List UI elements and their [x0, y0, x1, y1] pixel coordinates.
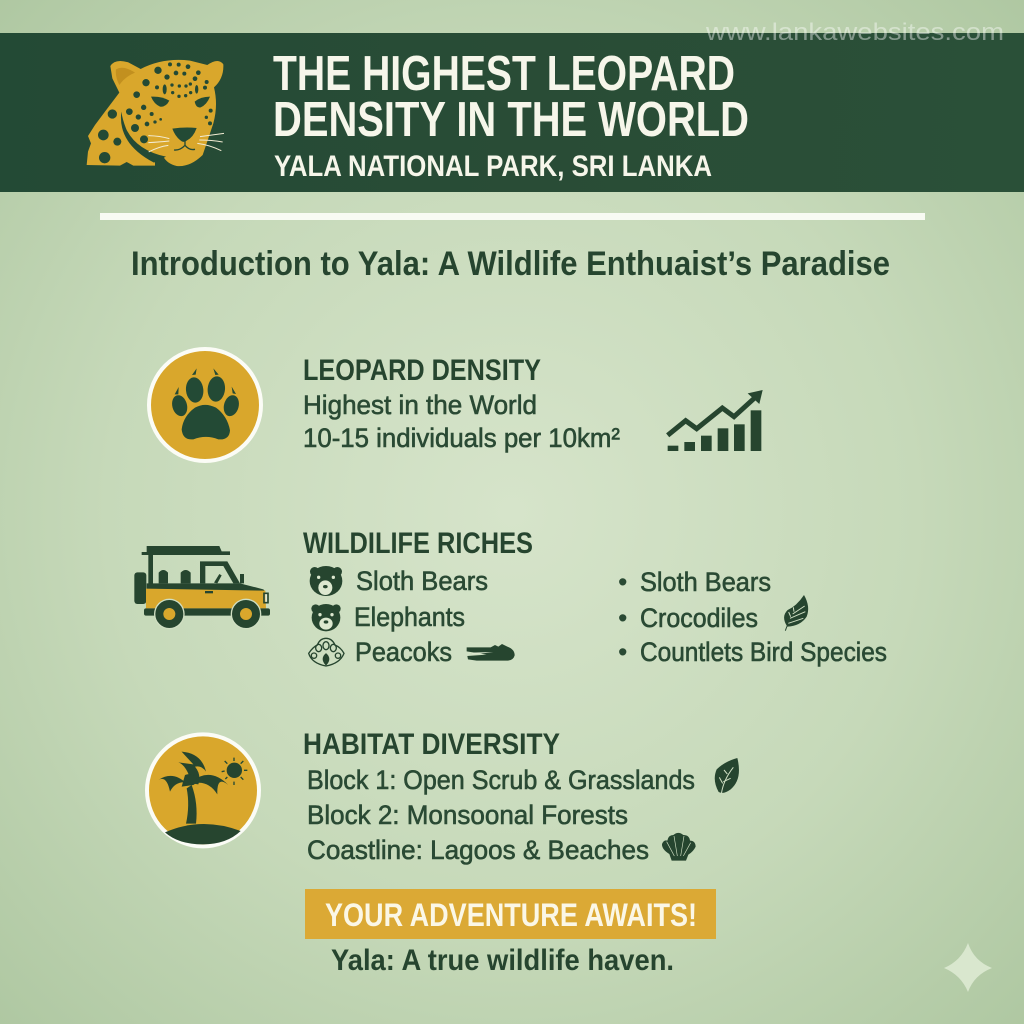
right species list [618, 567, 887, 667]
icon: rising chart [668, 390, 763, 451]
icon: sloth bear [310, 566, 342, 596]
icon: paw badge [149, 349, 261, 461]
title: YALA NATIONAL PARK, SRI LANKA [274, 150, 712, 183]
divider [100, 213, 925, 220]
right species list: Crocodiles [640, 603, 758, 633]
right species list: Sloth Bears [640, 567, 771, 597]
right species list: • [618, 603, 627, 633]
habitat list [307, 765, 695, 865]
elephants label: Elephants [354, 602, 465, 632]
section heading: Introduction to Yala: A Wildlife Enthuaist’s Paradise [131, 245, 890, 283]
icon: shell [662, 833, 696, 861]
panel: habitat diversity [147, 728, 739, 865]
sloth bears label: Sloth Bears [356, 566, 488, 596]
panel: wildlife riches [134, 527, 887, 667]
callout: adventure banner [305, 889, 716, 939]
habitat list: Block 2: Monsoonal Forests [307, 800, 628, 830]
habitat list: Coastline: Lagoos & Beaches [307, 835, 649, 865]
right species list: • [618, 567, 627, 597]
leopard density heading: LEOPARD DENSITY [303, 354, 541, 387]
icon: feather [784, 595, 808, 631]
closing line: Yala: A true wildlife haven. [331, 944, 674, 977]
leopard density text: 10-15 individuals per 10km² [303, 423, 620, 453]
title: DENSITY IN THE WORLD [273, 93, 749, 147]
icon: palm badge [147, 734, 259, 846]
habitat list: Block 1: Open Scrub & Grasslands [307, 765, 695, 795]
icon: sparkle [944, 943, 992, 992]
wildlife riches heading: WILDILIFE RICHES [303, 527, 533, 560]
right species list: Countlets Bird Species [640, 637, 887, 667]
icon: safari jeep [134, 546, 270, 629]
habitat diversity heading: HABITAT DIVERSITY [303, 728, 560, 761]
icon: peacock [309, 638, 344, 666]
callout: adventure banner: YOUR ADVENTURE AWAITS! [325, 897, 697, 933]
watermark: www.lankawebsites.com [705, 19, 1004, 46]
right species list: • [618, 637, 627, 667]
icon: leaf [715, 758, 739, 794]
leopard density text [303, 390, 620, 453]
panel: leopard density [149, 349, 763, 461]
header band [0, 33, 1024, 192]
leopard density text: Highest in the World [303, 390, 537, 420]
icon: leopard head [87, 60, 224, 166]
title: THE HIGHEST LEOPARD [273, 47, 735, 101]
icon: elephant (bear glyph) [311, 604, 341, 631]
title [273, 47, 749, 183]
icon: crocodile [467, 644, 515, 661]
peacocks label: Peacoks [355, 637, 452, 667]
